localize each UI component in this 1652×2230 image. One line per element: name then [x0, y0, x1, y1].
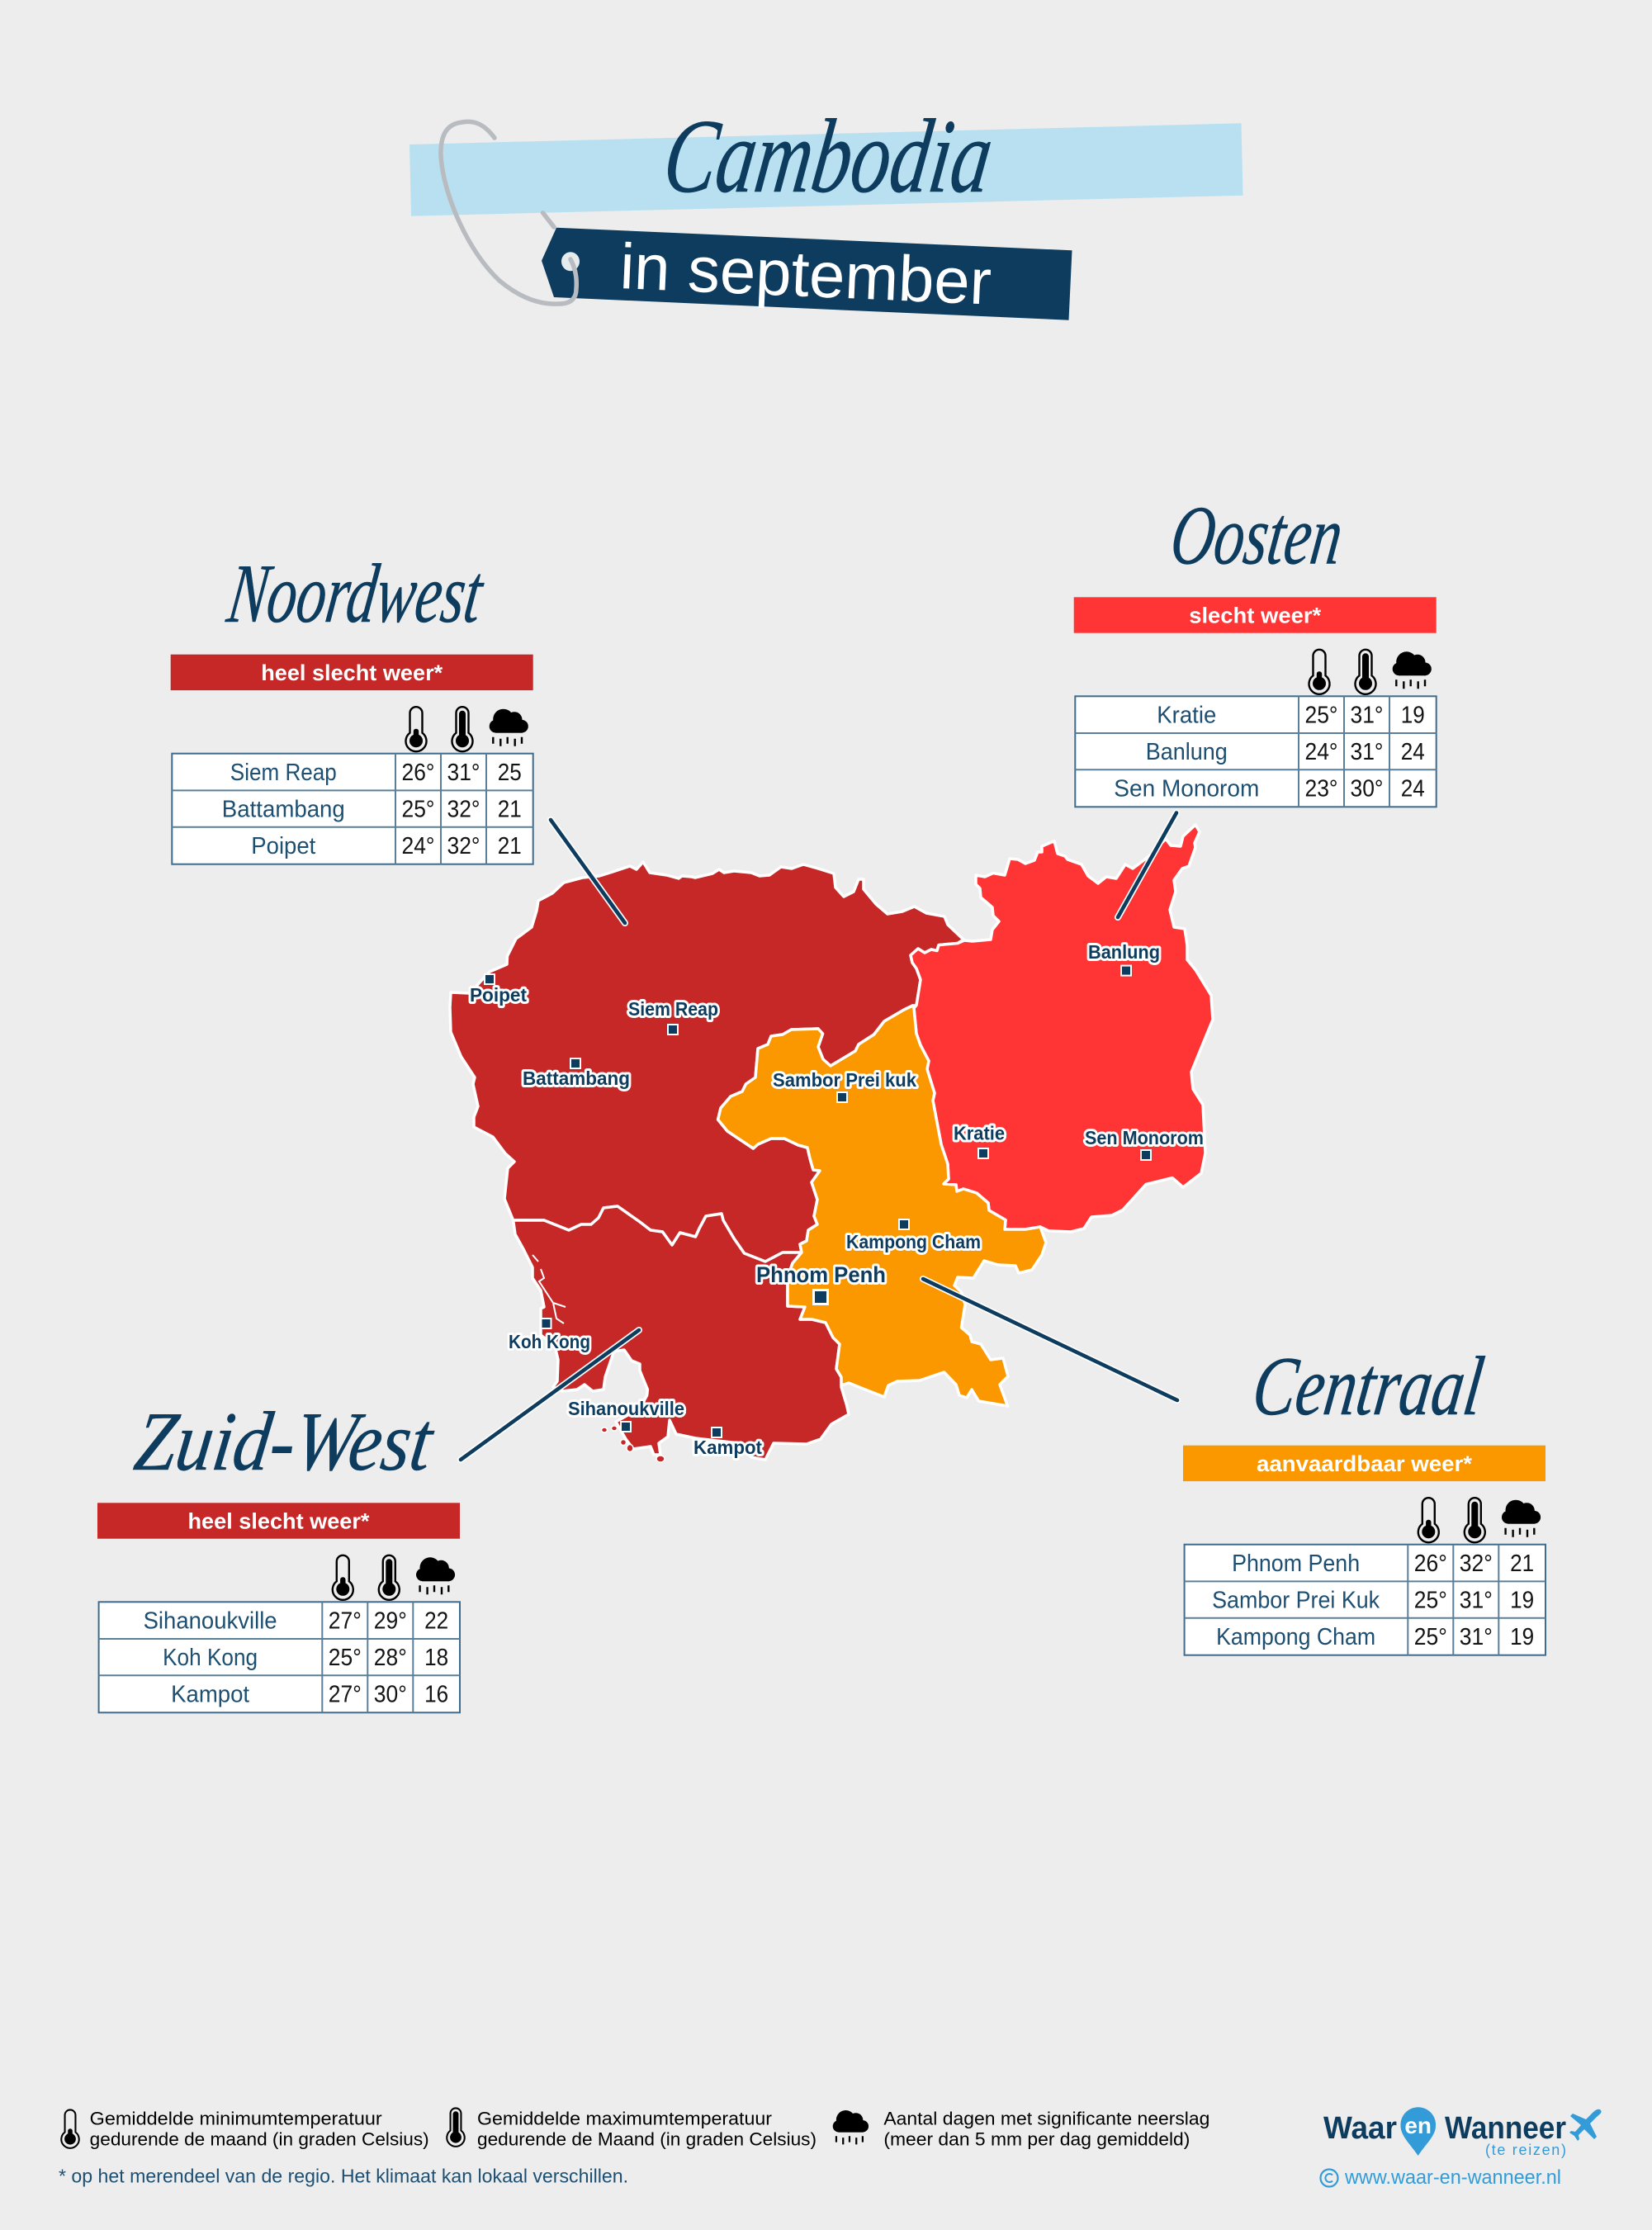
weather table: Koh Kong — [163, 1645, 258, 1671]
city: Battambang — [523, 1058, 630, 1089]
weather table: 29° — [374, 1608, 407, 1635]
weather table: 18 — [424, 1645, 448, 1671]
panel: Zuid-West — [97, 1395, 460, 1712]
icon: maximum temperature — [379, 1555, 400, 1600]
city: Kampong Cham: Kampong Cham — [846, 1231, 981, 1252]
city: Banlung — [1088, 941, 1160, 977]
panel: Centraal — [1183, 1340, 1545, 1655]
weather table: 19 — [1510, 1587, 1534, 1613]
tag: dark blue luggage label — [542, 228, 1072, 320]
weather table: 27° — [329, 1682, 362, 1708]
weather table: 31° — [1460, 1587, 1493, 1613]
panel: Oosten — [1074, 490, 1437, 807]
subtitle: in september: in september — [618, 230, 993, 319]
icon: minimum temperature — [333, 1555, 353, 1600]
weather table: 19 — [1401, 703, 1425, 729]
Koh Kong inlets — [533, 1255, 566, 1323]
heading: Oosten: Oosten — [1165, 490, 1348, 582]
weather table: 25° — [1304, 703, 1337, 729]
city: Poipet: Poipet — [470, 984, 527, 1006]
icon: minimum temperature — [1418, 1498, 1439, 1542]
weather table: 25 — [498, 760, 522, 786]
weather table: 25° — [1414, 1587, 1447, 1613]
weather table: 25° — [402, 796, 435, 822]
legend text: minimum temperature: gedurende de maand (in graden Celsius) — [90, 2128, 429, 2149]
city: Siem Reap: Siem Reap — [628, 998, 718, 1020]
icon: rain — [1502, 1500, 1541, 1537]
city: Phnom Penh: Phnom Penh — [756, 1262, 886, 1287]
title block — [409, 97, 1243, 320]
weather banner — [171, 655, 533, 690]
weather table: 21 — [1510, 1551, 1534, 1577]
weather table: 21 — [498, 796, 522, 822]
icon: rain — [1393, 651, 1432, 689]
legend icon: maximum temperature — [447, 2108, 465, 2147]
heading: Centraal: Centraal — [1247, 1340, 1489, 1433]
icon: rain — [490, 709, 528, 746]
legend text: rain: Aantal dagen met significante neerslag — [883, 2108, 1209, 2128]
weather table: 16 — [424, 1682, 448, 1708]
weather banner — [97, 1503, 460, 1539]
tag string — [441, 121, 576, 304]
city: Kampong Cham — [846, 1219, 981, 1252]
weather table: 25° — [329, 1645, 362, 1671]
weather table: 25° — [1414, 1624, 1447, 1650]
weather table: Sihanoukville — [144, 1608, 277, 1635]
weather table: 31° — [1350, 739, 1383, 765]
city: Kampot — [693, 1427, 762, 1458]
legend icon: minimum temperature — [61, 2109, 79, 2148]
city: Kratie: Kratie — [954, 1123, 1005, 1144]
footnote: * op het merendeel van de regio. Het klimaat kan lokaal verschillen. — [59, 2165, 628, 2186]
weather table: Sen Monorom — [1114, 776, 1259, 803]
city: Koh Kong: Koh Kong — [509, 1331, 590, 1352]
weather table: 24° — [1304, 739, 1337, 765]
pin text: en: en — [1404, 2113, 1432, 2138]
leader line: Zuid-West — [461, 1330, 639, 1460]
leader line: Oosten — [1118, 812, 1176, 917]
legend — [59, 2108, 1209, 2186]
city: Kampot: Kampot — [693, 1437, 762, 1458]
weather table: 31° — [447, 760, 480, 786]
islands off Sihanoukville — [601, 1426, 665, 1462]
region: Centraal — [718, 1006, 1046, 1406]
banner text: aanvaardbaar weer* — [1257, 1451, 1473, 1476]
banner text: slecht weer* — [1189, 604, 1322, 628]
weather table: 24 — [1401, 776, 1425, 803]
city: Koh Kong — [509, 1318, 590, 1352]
website url: www.waar-en-wanneer.nl — [1344, 2166, 1561, 2189]
weather table: 26° — [1414, 1551, 1447, 1577]
panel: Noordwest — [171, 547, 533, 864]
logo tagline: (te reizen) — [1485, 2142, 1566, 2158]
weather table: 22 — [424, 1608, 448, 1635]
weather table: Kampong Cham — [1216, 1624, 1375, 1650]
icon: map pin — [1400, 2107, 1436, 2156]
weather table: 28° — [374, 1645, 407, 1671]
region: Zuid-West — [514, 1206, 849, 1460]
weather banner — [1074, 597, 1437, 633]
heading: Zuid-West: Zuid-West — [130, 1395, 440, 1489]
logo word: Waar: Waar — [1323, 2111, 1397, 2146]
city: Siem Reap — [628, 998, 718, 1035]
icon: plane — [1569, 2109, 1602, 2141]
city: Banlung: Banlung — [1088, 941, 1160, 963]
weather table: 31° — [1460, 1624, 1493, 1650]
map of Cambodia — [450, 812, 1213, 1462]
legend text: rain: (meer dan 5 mm per dag gemiddeld) — [883, 2128, 1190, 2149]
weather table: Siem Reap — [230, 760, 337, 786]
city: Poipet — [470, 973, 527, 1006]
region: Oosten — [911, 825, 1213, 1232]
weather table: 32° — [1460, 1551, 1493, 1577]
weather table: 32° — [447, 833, 480, 859]
weather table: 32° — [447, 796, 480, 822]
legend text: maximum temperature: gedurende de Maand (in graden Celsius) — [477, 2128, 817, 2149]
legend text: minimum temperature: Gemiddelde minimumtemperatuur — [90, 2108, 382, 2128]
logo: Waar en Wanneer — [1321, 2107, 1602, 2189]
weather table: Sambor Prei Kuk — [1212, 1587, 1380, 1613]
tag hole — [561, 252, 580, 271]
weather table: 19 — [1510, 1624, 1534, 1650]
weather table: 23° — [1304, 776, 1337, 803]
city: Kratie — [954, 1123, 1005, 1159]
city: Sambor Prei kuk: Sambor Prei kuk — [773, 1069, 916, 1091]
title band: light blue — [409, 123, 1243, 216]
title: Cambodia: Cambodia — [657, 97, 1000, 215]
weather table — [1075, 696, 1437, 807]
weather table — [99, 1602, 460, 1712]
weather table: 21 — [498, 833, 522, 859]
banner text: heel slecht weer* — [188, 1509, 370, 1534]
icon: maximum temperature — [452, 707, 472, 751]
weather table: Banlung — [1146, 739, 1228, 765]
weather table: Phnom Penh — [1232, 1551, 1360, 1577]
city: Battambang: Battambang — [523, 1068, 630, 1089]
weather table: 24° — [402, 833, 435, 859]
icon: minimum temperature — [406, 707, 426, 751]
weather table: 24 — [1401, 739, 1425, 765]
weather table: 30° — [1350, 776, 1383, 803]
weather table — [1185, 1545, 1545, 1655]
legend text: maximum temperature: Gemiddelde maximumtemperatuur — [477, 2108, 772, 2128]
weather table: Kampot — [171, 1682, 249, 1708]
city: Phnom Penh — [756, 1262, 886, 1305]
weather table: Kratie — [1157, 703, 1216, 729]
icon: maximum temperature — [1465, 1498, 1485, 1542]
logo word: Wanneer: Wanneer — [1445, 2111, 1566, 2146]
weather table — [172, 754, 533, 864]
weather table: 26° — [402, 760, 435, 786]
weather table: Battambang — [222, 796, 345, 822]
banner text: heel slecht weer* — [261, 660, 443, 685]
region: Noordwest — [450, 862, 963, 1262]
city: Sambor Prei kuk — [773, 1069, 916, 1103]
icon: rain — [416, 1557, 455, 1594]
legend icon: rain — [833, 2110, 869, 2144]
city: Sen Monorom — [1085, 1127, 1204, 1161]
icon: maximum temperature — [1356, 650, 1375, 694]
weather table: 30° — [374, 1682, 407, 1708]
weather table: 31° — [1350, 703, 1383, 729]
city: Sen Monorom: Sen Monorom — [1085, 1127, 1204, 1148]
heading: Noordwest: Noordwest — [222, 547, 490, 641]
city: Sihanoukville — [568, 1398, 684, 1432]
leader line: Noordwest — [551, 820, 625, 923]
copyright symbol — [1321, 2170, 1337, 2186]
weather table: 27° — [329, 1608, 362, 1635]
leader line: Centraal — [923, 1279, 1177, 1400]
weather banner — [1183, 1446, 1545, 1481]
icon: minimum temperature — [1309, 650, 1329, 694]
weather table: Poipet — [251, 833, 315, 859]
city: Sihanoukville: Sihanoukville — [568, 1398, 684, 1419]
